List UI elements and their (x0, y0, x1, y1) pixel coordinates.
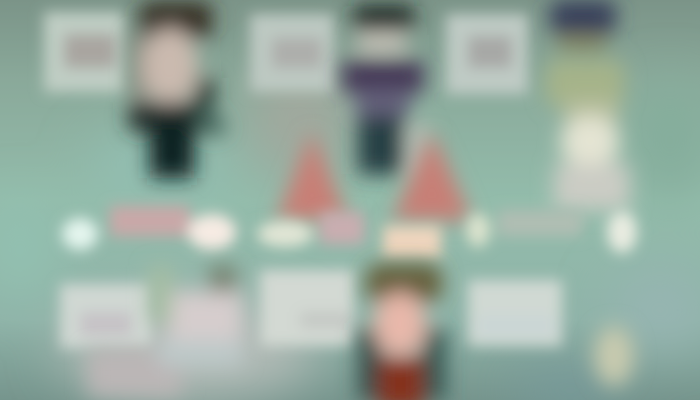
panel: top left card (44, 12, 124, 92)
panel: top middle card (250, 14, 334, 92)
panel: bottom left card (60, 284, 152, 348)
badge: pale circle lower right (594, 326, 634, 386)
figure: red outfit character (358, 264, 446, 400)
red triangular shapes (276, 132, 472, 220)
panel: bottom centre card (260, 270, 354, 346)
figure: purple outfit character (342, 6, 428, 180)
figure: light green outfit character (546, 0, 630, 210)
figure: dark suit character (128, 2, 229, 178)
middle row band of labels (62, 206, 637, 258)
panel: top right card (446, 14, 528, 94)
panel: bottom right card (468, 280, 562, 346)
figure: pale pink character lower left (88, 266, 242, 396)
